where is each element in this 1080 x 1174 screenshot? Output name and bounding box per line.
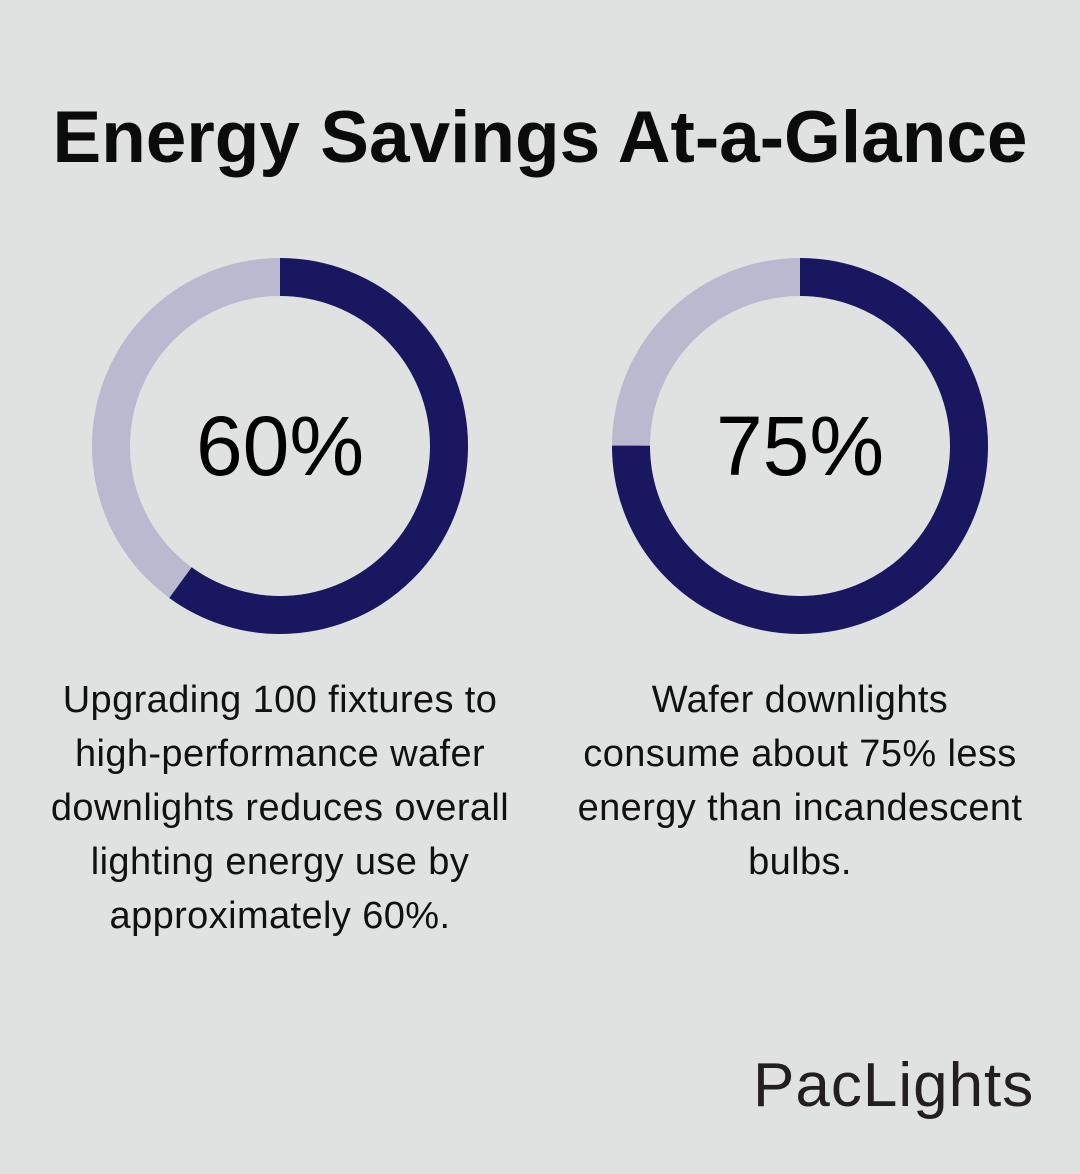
caption: 60%: approximately 60%.	[110, 895, 450, 937]
donut chart: 60%	[92, 258, 468, 634]
caption: 60%: downlights reduces overall	[51, 787, 509, 829]
title: Energy Savings At-a-Glance	[52, 97, 1028, 178]
caption: 60%: high-performance wafer	[75, 733, 485, 775]
stat: 75%: 75%	[716, 399, 884, 493]
stat: 60%: 60%	[196, 399, 364, 493]
caption: 60%	[51, 679, 509, 937]
caption: 75%: energy than incandescent	[578, 787, 1022, 829]
caption: 60%: lighting energy use by	[91, 841, 469, 883]
donut chart: 75%	[612, 258, 988, 634]
caption: 75%	[578, 679, 1022, 883]
caption: 75%: Wafer downlights	[652, 679, 948, 721]
caption: 60%: Upgrading 100 fixtures to	[63, 679, 497, 721]
logo: PacLights	[753, 1051, 1034, 1120]
caption: 75%: consume about 75% less	[583, 733, 1017, 775]
caption: 75%: bulbs.	[748, 841, 852, 883]
